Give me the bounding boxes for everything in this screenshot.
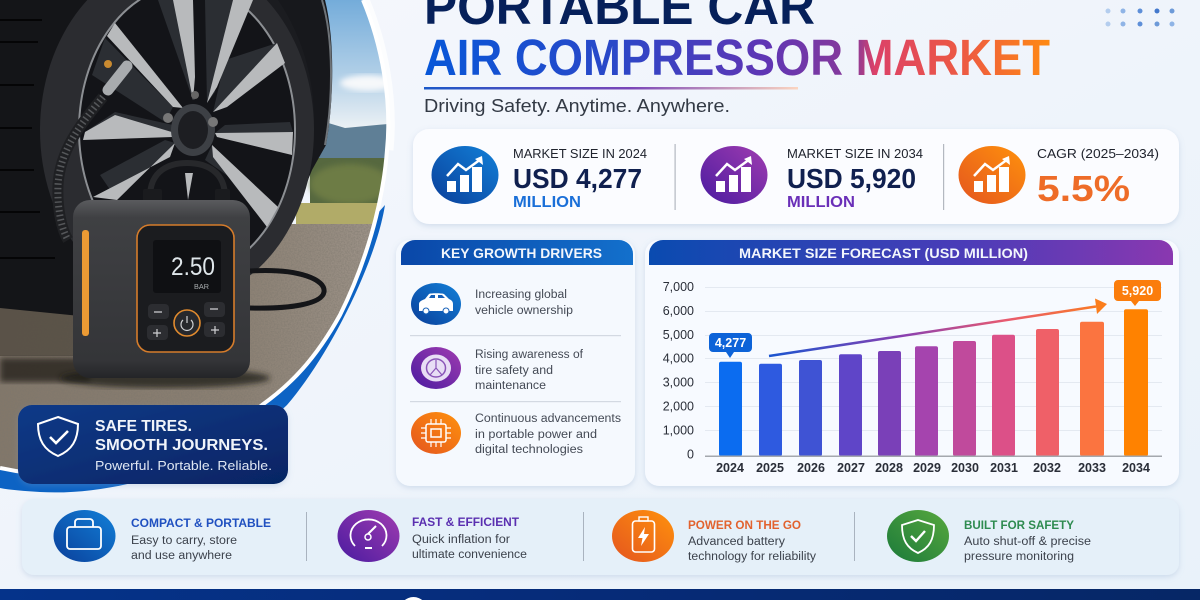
feature: power on the go: POWER ON THE GO [688,520,801,532]
bar chart: 0 [687,448,694,462]
panel: key growth drivers [396,240,635,486]
display reading: 2.50 [171,253,215,281]
stat: CAGR: CAGR (2025–2034) [1037,147,1159,161]
feature: built for safety: pressure monitoring [964,551,1074,563]
title: AIR COMPRESSOR MARKET [424,29,1050,86]
callout: 2034 value: 5,920 [1122,284,1153,298]
badge heading: SAFE TIRES. [95,418,192,435]
feature: fast and efficient: FAST & EFFICIENT [412,517,519,529]
icon: shield check [38,417,78,456]
feature: power on the go: technology for reliability [688,551,816,563]
callout: 2024 value: 4,277 [715,336,746,350]
panel: key statistics [413,129,1179,224]
stat: market size 2024 [432,146,647,211]
stat: market size 2024: MILLION [513,194,581,211]
feature: power on the go: Advanced battery [688,536,785,548]
bar chart: 2030 [951,461,979,475]
feature: power on the go [612,510,816,563]
bar chart: 2032 [1033,461,1061,475]
bar chart: 2024 [716,461,744,475]
panel: product features [22,499,1179,575]
driver: portable power technologies: in portable power and [475,429,597,441]
driver: tire safety [411,347,584,392]
driver: portable power technologies [411,412,621,456]
tagline: Driving Safety. Anytime. Anywhere. [424,96,730,116]
badge heading: SMOOTH JOURNEYS. [95,437,268,454]
panel: market size forecast [645,240,1179,486]
callout: 2024 value [709,333,752,358]
stat: market size 2024: USD 4,277 [513,163,642,194]
driver: portable power technologies: digital technologies [475,444,583,456]
driver: portable power technologies: Continuous advancements [475,413,621,425]
driver: tire safety: tire safety and [475,365,553,377]
driver: tire safety: maintenance [475,380,546,392]
bar chart: 2,000 [663,400,694,414]
bar chart: 2034 [1122,461,1150,475]
feature: compact and portable: COMPACT & PORTABLE [131,518,271,530]
bar chart: 6,000 [663,304,694,318]
hero photo: tire and portable compressor [0,0,400,492]
bar chart: 2031 [990,461,1018,475]
feature: built for safety [887,510,1091,563]
callout badge: safe tires [18,405,288,484]
feature: fast and efficient: ultimate convenience [412,549,527,561]
feature: built for safety: Auto shut-off & precise [964,536,1091,548]
feature: built for safety: BUILT FOR SAFETY [964,520,1074,532]
bar chart: 2033 [1078,461,1106,475]
stat: market size 2034: USD 5,920 [787,163,916,194]
heading: key growth drivers [401,240,633,265]
driver: vehicle ownership [411,283,573,325]
bar chart: 2028 [875,461,903,475]
bar chart: 4,000 [663,352,694,366]
footer band [0,589,1200,600]
bar chart: 2029 [913,461,941,475]
bar chart: 3,000 [663,376,694,390]
icon: compressor device [73,163,250,378]
feature: compact and portable: and use anywhere [131,550,232,562]
stat: market size 2034: MILLION [787,194,855,211]
bar chart: 1,000 [663,424,694,438]
feature: fast and efficient [338,510,527,562]
stat: market size 2034: MARKET SIZE IN 2034 [787,147,923,161]
badge heading [95,418,268,454]
heading: market size forecast [649,240,1173,265]
stat: market size 2024: MARKET SIZE IN 2024 [513,147,647,161]
stat: market size 2034 [700,146,923,211]
arrow: growth trend [769,298,1107,356]
callout: 2034 value [1114,280,1161,306]
feature: fast and efficient: Quick inflation for [412,534,510,546]
feature: compact and portable [54,510,271,562]
heading: market size forecast: MARKET SIZE FORECAST (USD MILLION) [739,245,1028,261]
driver: tire safety: Rising awareness of [475,349,584,361]
driver: vehicle ownership: vehicle ownership [475,305,573,317]
stat: CAGR [958,146,1159,209]
badge tagline: Powerful. Portable. Reliable. [95,458,272,473]
heading: key growth drivers: KEY GROWTH DRIVERS [441,245,602,261]
bar chart: 2025 [756,461,784,475]
stat: CAGR: 5.5% [1037,168,1130,209]
driver: vehicle ownership: Increasing global [475,289,567,301]
bar chart: 5,000 [663,328,694,342]
title [424,0,1050,86]
feature: compact and portable: Easy to carry, store [131,535,237,547]
bar chart: 2026 [797,461,825,475]
bar chart: 7,000 [663,280,694,294]
display unit: BAR [194,284,209,291]
bar chart: 2027 [837,461,865,475]
decorative dots [1106,8,1174,26]
bar chart [663,280,1162,475]
